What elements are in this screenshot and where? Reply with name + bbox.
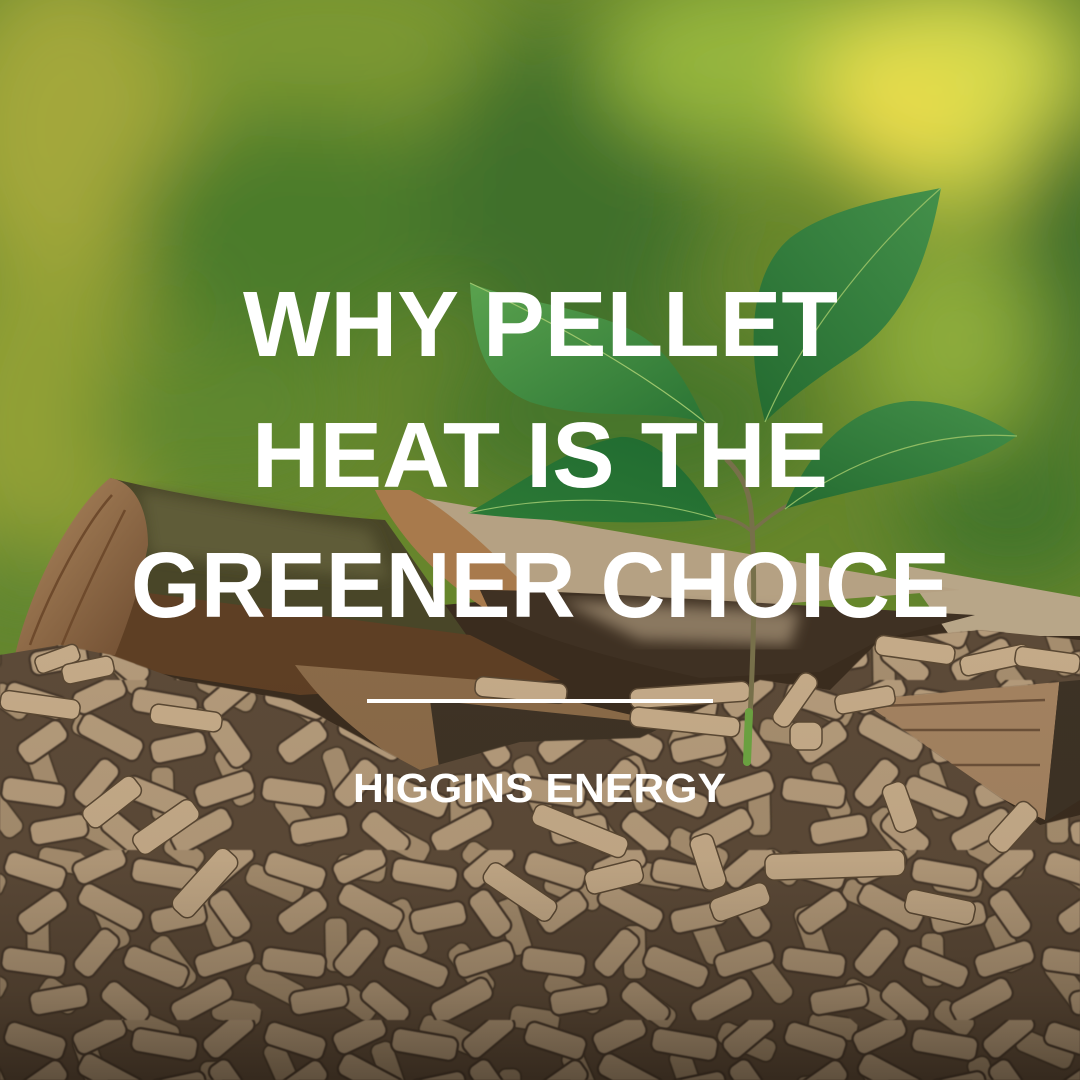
center slab grain face [375, 490, 530, 612]
divider line [367, 699, 713, 703]
right wedge log [858, 675, 1060, 820]
icon: upper right leaf [754, 188, 941, 422]
left log lower cut face [40, 590, 560, 695]
icon: upper left leaf [470, 283, 706, 423]
brand name: HIGGINS ENERGY [353, 765, 726, 811]
center slab bark [480, 590, 975, 678]
title: WHY PELLET [243, 272, 838, 376]
left log bark [110, 478, 470, 640]
left log end grain [15, 478, 148, 655]
logs [0, 478, 1080, 830]
wood pellets pile [0, 630, 1080, 1080]
title: HEAT IS THE [252, 403, 828, 507]
background: blurred green foliage [0, 0, 1080, 700]
icon: right leaf [785, 401, 1017, 509]
title: GREENER CHOICE [131, 533, 950, 637]
icon: stem [716, 460, 788, 762]
plant seedling [468, 188, 1017, 762]
title [131, 272, 950, 637]
shadow base under the logs [0, 600, 1080, 830]
center slab top [375, 490, 960, 610]
back right slab [900, 565, 1080, 636]
lower front log [295, 665, 740, 775]
icon: lower left leaf [468, 437, 717, 522]
